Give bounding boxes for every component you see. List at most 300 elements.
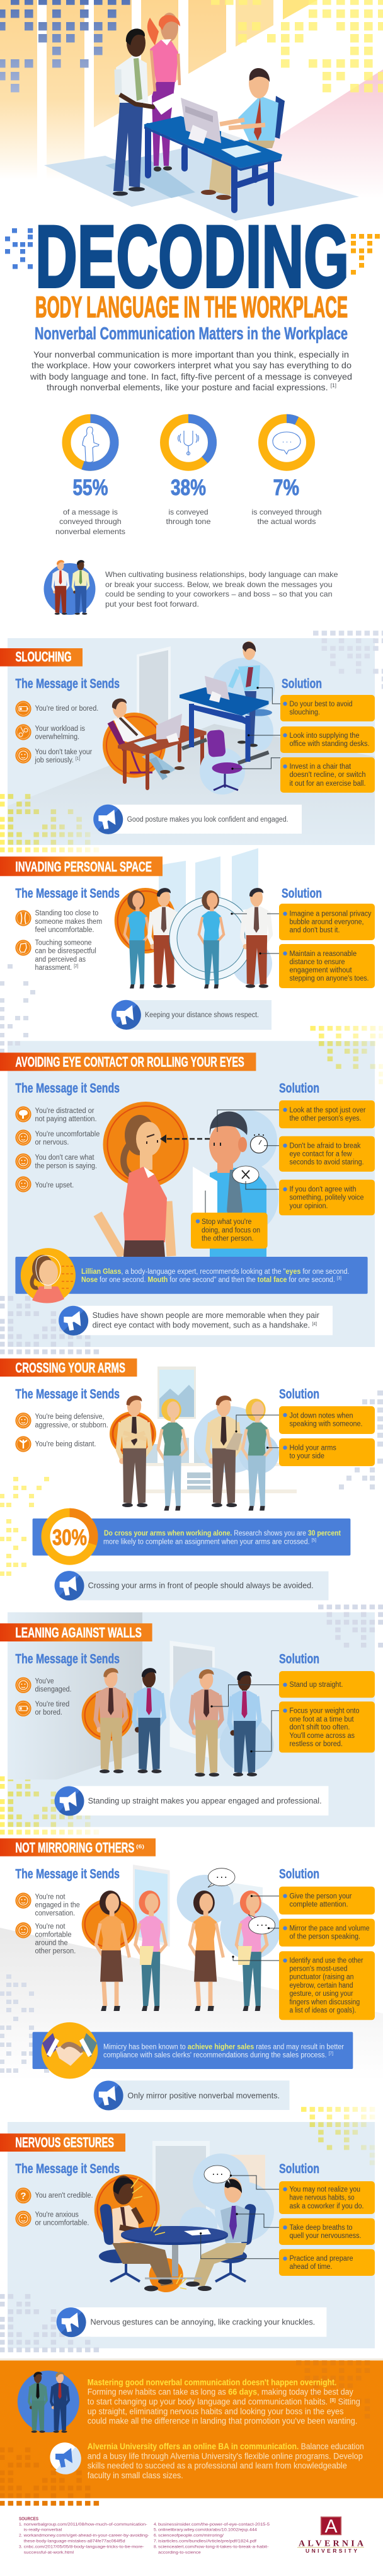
illustration: leaning man — [82, 1668, 164, 1773]
banner: mimicry: [7] — [329, 2052, 333, 2056]
intro paragraph — [30, 349, 352, 392]
illustration: slouching man at desk — [103, 699, 207, 788]
solution: attention — [279, 1887, 375, 1915]
message: tired or bored — [15, 701, 98, 717]
solution: deep breaths: Take deep breaths to — [290, 2224, 353, 2232]
desk — [148, 126, 271, 210]
text: make or break — [105, 570, 338, 609]
banner: Lillian Glass: [3] — [337, 1276, 341, 1281]
sources: cnbc.com/2017/05/05/8-body-language-tricks-to-be-more- — [24, 2544, 144, 2549]
stat: 55%: of a message is — [63, 508, 118, 516]
solution: privacy bubble: bubble around everyone, — [290, 919, 364, 926]
heading bar: crossing — [0, 1358, 137, 1377]
banner: Lillian Glass: Nose for one second. Mouth for one second" and then the total face for one second. — [81, 1276, 339, 1284]
message: tired or bored: You're tired or bored. — [35, 705, 98, 713]
icon: white megaphone — [50, 2442, 81, 2474]
solution: avoid slouching: slouching. — [290, 709, 320, 716]
message: anxious: You're anxious — [35, 2212, 79, 2219]
solution: practice — [279, 2249, 375, 2276]
solution: privacy bubble — [279, 904, 375, 940]
solution: spot over eyes: the other person's eyes. — [290, 1115, 362, 1122]
icon: woman face — [21, 1248, 76, 1303]
solution: punctuator: eyebrow, certain hand — [290, 1982, 353, 1990]
heading: solution: Solution — [282, 885, 322, 900]
icon: person — [83, 427, 99, 462]
icon: handshake — [42, 2022, 98, 2078]
illustration: privacy bubble — [169, 888, 272, 988]
message: upset — [15, 1176, 74, 1192]
solution: stop and focus — [191, 1213, 268, 1249]
stat: 7%: 7% — [273, 475, 299, 500]
message: do not care: You don't care what — [35, 1154, 94, 1162]
text: mastering nonverbal communication: to start changing up your body language and communication habits. — [88, 2397, 343, 2406]
heading: solution: Solution — [279, 1866, 319, 1881]
man standing — [113, 28, 155, 195]
sources: 7. — [154, 2539, 157, 2544]
heading: solution: Solution — [279, 1652, 319, 1667]
arrows: connectors — [232, 1895, 279, 1961]
illustration: man with good eye contact — [193, 1110, 278, 1257]
panel: not mirroring others — [0, 1838, 383, 2111]
solution: ask a coworker: You may not realize you — [290, 2186, 360, 2194]
solution: standing desks — [280, 726, 375, 753]
solution: focus weight: restless or bored. — [290, 1740, 343, 1748]
donut: 30%: 30% — [52, 1525, 87, 1550]
message: tired: You're tired — [35, 1701, 69, 1708]
solution: reasonable distance: engagement without — [290, 967, 352, 974]
heading bar: slouching: SLOUCHING — [15, 649, 72, 665]
door — [137, 646, 171, 744]
illustration: woman rolling eyes — [98, 1102, 189, 1257]
solution: punctuator: gesture, or using your — [290, 1990, 353, 1998]
message: uncomfortable: You're uncomfortable — [35, 1131, 100, 1138]
icon: two men talking — [44, 560, 96, 615]
panel: nervous gestures — [0, 2109, 375, 2350]
message: touching: Touching someone — [35, 940, 92, 947]
heading: the message it sends: The Message it Sends — [15, 1081, 120, 1096]
text: make or break: could be sending to your coworkers – and boss – so that you can — [105, 590, 333, 598]
message: distracted: not paying attention. — [35, 1116, 97, 1123]
solution: arms at side: Hold your arms — [290, 1444, 336, 1452]
illustration: standing straight — [170, 1667, 274, 1776]
callout: knuckles — [57, 2307, 326, 2337]
sources: these-body-language-mistakes-a874fe77ac064f5d — [24, 2539, 125, 2544]
text: Alvernia University offer: skills needed to succeed as a professional and learn from knowledgeable — [88, 2461, 347, 2471]
callout: memorable: direct eye contact with body movement, such as a handshake. — [93, 1320, 318, 1329]
solution: stop and focus: doing, and focus on — [202, 1227, 260, 1234]
message: tired — [15, 1701, 69, 1716]
arrows: connectors — [200, 2174, 279, 2259]
illustration: crossed arms — [110, 1396, 186, 1510]
banner: 30% — [33, 1513, 350, 1561]
illustration: too close — [115, 888, 178, 988]
solution: notes — [279, 1406, 375, 1434]
panel: leaning against walls — [0, 1607, 383, 1832]
intro paragraph: through nonverbal elements, like your posture and facial expressions. — [47, 382, 317, 392]
stat: 7% — [252, 419, 321, 526]
solution: spot over eyes: Look at the spot just over — [290, 1107, 366, 1114]
sources: 2. — [19, 2534, 23, 2538]
callout: mirror positive: Only mirror positive nonverbal movements. — [127, 2090, 280, 2100]
message: defensive: aggressive, or stubborn. — [35, 1421, 108, 1429]
message: not comfortable: other person. — [35, 1948, 76, 1955]
callout: memorable: [4] — [312, 1322, 317, 1326]
sources: sciencealert.com/how-long-it-takes-to-break-a-habit- — [158, 2544, 268, 2549]
message: not comfortable — [15, 1922, 76, 1955]
sources: isiarticles.com/bundles/Article/pre/pdf/1824.pdf — [158, 2539, 256, 2544]
panel: slouching — [0, 633, 383, 850]
heading bar: eye contact — [0, 1052, 256, 1071]
solution: stand straight: Stand up straight. — [290, 1681, 343, 1689]
callout: good posture: Good posture makes you look confident and engaged. — [127, 816, 289, 824]
message: too close: someone makes them — [35, 918, 102, 926]
icon: stopwatch — [251, 1134, 267, 1153]
sources: according-to-science — [158, 2550, 201, 2555]
solution: focus weight — [279, 1701, 375, 1752]
icon: tuning fork — [178, 431, 199, 455]
solution: punctuator: a list of ideas or goals). — [290, 2007, 357, 2014]
heading: the message it sends: The Message it Sends — [15, 1386, 120, 1401]
message: not serious: job seriously. — [35, 757, 77, 764]
text: mastering nonverbal communication — [88, 2377, 360, 2426]
message: anxious — [15, 2211, 89, 2227]
heading bar: slouching — [0, 648, 83, 667]
hero: office scene — [0, 0, 383, 221]
desk top and monitor — [144, 98, 282, 171]
stat: 55%: nonverbal elements — [55, 527, 125, 536]
solution: reasonable distance — [279, 944, 375, 988]
panel: conclusion — [0, 2358, 383, 2503]
stat: 7%: is conveyed through — [252, 508, 321, 516]
solution: privacy bubble: and don't bust it. — [290, 927, 340, 935]
message: do not care: the person is saying. — [35, 1162, 97, 1170]
solution: standing desks: office with standing desks. — [290, 740, 369, 748]
callout: knuckles: Nervous gestures can be annoying, like cracking your knuckles. — [91, 2317, 315, 2327]
stat: 55% — [55, 419, 125, 536]
solution: arms at side — [279, 1438, 375, 1466]
nervous marks — [131, 2178, 186, 2289]
solution: reasonable distance: distance to ensure — [290, 959, 345, 966]
solution: reasonable distance: stepping on anyone's toes. — [290, 975, 369, 982]
message: uncomfortable: or nervous. — [35, 1139, 69, 1146]
message: not engaged: engaged in the — [35, 1901, 80, 1909]
message: workload — [15, 724, 85, 741]
heading: solution: Solution — [279, 1386, 319, 1401]
solution: pace and volume: Mirror the pace and volume — [290, 1925, 369, 1933]
solution: privacy bubble: Imagine a personal privacy — [290, 911, 372, 918]
heading bar: eye contact: AVOIDING EYE CONTACT OR ROLLING YOUR EYES — [15, 1054, 244, 1070]
paper — [152, 93, 178, 115]
stat: 55%: 55% — [73, 475, 108, 500]
solution: punctuator: Identify and use the other — [290, 1957, 363, 1965]
solution: punctuator: person's most-used — [290, 1966, 348, 1973]
message: do not care — [15, 1153, 97, 1170]
intro paragraph: Your nonverbal communication is more important than you think, especially in — [33, 349, 349, 359]
message: upset: You're upset. — [35, 1182, 74, 1189]
message: not credible — [15, 2188, 93, 2203]
solution: focus weight: You'll come across as — [290, 1732, 355, 1740]
office background: window and shelves — [139, 1367, 297, 1493]
callout: mirror positive — [94, 2080, 290, 2111]
banner: Lillian Glass — [15, 1248, 368, 1303]
arrows: connectors — [210, 1685, 279, 1752]
banner: mimicry — [33, 2022, 353, 2078]
solution: arms at side: to your side — [290, 1453, 324, 1460]
text: Alvernia University offer: Alvernia University offers an online BA in communication. Balance education — [88, 2442, 364, 2451]
solution: voice opinion — [279, 1180, 375, 1215]
message: touching: and perceived as — [35, 956, 86, 964]
callout: keep distance: Keeping your distance shows respect. — [145, 1011, 259, 1019]
speech bubble: bottom — [248, 1915, 275, 1934]
text: mastering nonverbal communication: Mastering good nonverbal communication doesn't happen overnight. — [88, 2377, 336, 2387]
sources: 3. — [19, 2544, 23, 2549]
orange pixel squares — [351, 234, 380, 275]
solution: notes: Jot down notes when — [290, 1412, 353, 1419]
sources: SOURCES — [19, 2517, 38, 2522]
solution: reasonable distance: Maintain a reasonable — [290, 950, 357, 958]
callout: good posture — [93, 805, 302, 834]
arrows: connectors — [231, 687, 280, 770]
heading bar: leaning — [0, 1623, 152, 1641]
sources: workandmoney.com/s/get-ahead-in-your-career-by-avoiding- — [23, 2534, 149, 2538]
text: Alvernia University offer: and a busy life through Alvernia University's flexible online programs. Develop — [88, 2451, 363, 2461]
text: make or break: or break your success. Below, we break down the messages you — [105, 580, 333, 589]
message: touching: can be disrespectful — [35, 948, 96, 955]
message: defensive — [15, 1413, 108, 1429]
solution: chair — [280, 757, 375, 793]
background: windows — [152, 2141, 265, 2245]
seated man — [238, 68, 285, 148]
message: workload: Your workload is — [35, 725, 85, 733]
text: mastering nonverbal communication: could make all the difference in landing that promotion you've been wanting. — [88, 2416, 357, 2426]
panel: eye contact — [0, 1029, 383, 1352]
solution: voice opinion: your opinion. — [290, 1203, 328, 1210]
solution: punctuator: punctuator (raising an — [290, 1974, 354, 1981]
intro paragraph: [1] — [331, 383, 336, 388]
panel: crossing your arms — [0, 1358, 383, 1600]
arrows: connectors — [235, 1415, 279, 1448]
solution: deep breaths: quell your nervousness. — [290, 2232, 362, 2240]
solution: break contact: eye contact for a few — [290, 1151, 352, 1158]
heading bar: crossing: CROSSING YOUR ARMS — [15, 1360, 125, 1376]
solution: deep breaths — [279, 2218, 375, 2245]
illustration: not mirroring — [82, 1891, 166, 2011]
stat: 38%: through tone — [166, 517, 211, 526]
sources: 8. — [154, 2544, 157, 2549]
banner: mimicry: compliance with sales clerks' recommendations during the sales process. — [103, 2052, 338, 2060]
solution: pace and volume: of the person speaking. — [290, 1933, 360, 1941]
solution: chair: doesn't recline, or switch — [290, 771, 365, 779]
wall and door — [8, 1612, 215, 1780]
message: not serious: [1] — [76, 757, 80, 761]
solution: pace and volume — [279, 1919, 375, 1947]
message: workload: overwhelming. — [35, 733, 79, 741]
solution: voice opinion: If you don't agree with — [290, 1186, 357, 1194]
logo: Alvernia University: ALVERNIA — [299, 2539, 364, 2549]
message: not serious: You don't take your — [35, 749, 92, 756]
message: not comfortable: comfortable — [35, 1932, 72, 1939]
speech bubble — [204, 2165, 231, 2184]
message: distant: You're being distant. — [35, 1440, 96, 1448]
sources — [19, 2517, 270, 2555]
message: disengaged: You've — [35, 1677, 54, 1685]
stat: 38%: is conveyed — [169, 508, 208, 516]
solution: break contact: Don't be afraid to break — [290, 1143, 361, 1150]
message: touching — [15, 940, 96, 972]
solution: break contact — [279, 1136, 375, 1172]
heading: the message it sends: The Message it Sends — [15, 676, 120, 691]
seated man: left — [99, 2176, 173, 2292]
sources: businessinsider.com/the-power-of-eye-contact-2015-5 — [158, 2522, 270, 2527]
solution: ask a coworker: have nervous habits, so — [290, 2194, 354, 2202]
banner: mimicry: Mimicry has been known to achieve higher sales rates and may result in better — [103, 2043, 344, 2051]
text: mastering nonverbal communication: Forming new habits can take as long as 66 days, making today the best day — [88, 2387, 353, 2397]
illustration: standing desk and chair — [180, 641, 275, 795]
solution: practice: Practice and prepare — [290, 2255, 353, 2263]
text: Alvernia University offer — [88, 2442, 364, 2480]
solution: notes: speaking with someone. — [290, 1421, 363, 1428]
message: anxious: or uncomfortable. — [35, 2219, 89, 2227]
sources: 6. — [154, 2534, 157, 2538]
stat: 7%: the actual words — [257, 517, 316, 526]
heading bar: mirroring — [0, 1838, 156, 1856]
heading: the message it sends: The Message it Sends — [15, 1652, 120, 1667]
heading: the message it sends: The Message it Sends — [15, 885, 120, 900]
solution: focus weight: Focus your weight onto — [290, 1708, 359, 1715]
heading bar: mirroring: (6) — [136, 1844, 144, 1850]
donut: 30% — [45, 1513, 93, 1561]
message: too close: Standing too close to — [35, 910, 98, 918]
solution: attention: Give the person your — [290, 1893, 352, 1901]
solution: ask a coworker: ask a coworker if you do. — [290, 2203, 364, 2210]
heading bar: leaning: LEANING AGAINST WALLS — [15, 1625, 142, 1641]
text: make or break: When cultivating business relationships, body language can make — [105, 570, 338, 579]
sources: successful-at-work.html — [24, 2550, 74, 2555]
seated man: right — [186, 2177, 256, 2291]
banner: 30%: [5] — [312, 1538, 316, 1542]
callout: memorable: Studies have shown people are more memorable when they pair — [93, 1310, 320, 1320]
heading bar: nervous: NERVOUS GESTURES — [15, 2135, 114, 2150]
message: tired: or bored. — [35, 1709, 62, 1716]
solution: standing desks: Look into supplying the — [290, 732, 359, 740]
windows — [159, 848, 258, 949]
icon: speech bubble — [273, 432, 300, 454]
message: not engaged: conversation. — [35, 1910, 75, 1918]
illustration: mirroring — [177, 1875, 280, 2011]
illustration: handshake — [18, 2370, 79, 2433]
stat: 38%: 38% — [171, 475, 206, 500]
solution: avoid slouching: Do your best to avoid — [290, 701, 353, 708]
message: uncomfortable — [15, 1129, 100, 1146]
icon: disagree bubble — [232, 1166, 259, 1184]
text: make or break: put your best foot forward. — [105, 600, 199, 609]
logo: Alvernia University: UNIVERSITY — [306, 2548, 357, 2554]
solution: chair: Invest in a chair that — [290, 763, 352, 771]
message: not comfortable: You're not — [35, 1923, 66, 1930]
message: too close: feel uncomfortable. — [35, 926, 94, 934]
solution: chair: it out for an exercise ball. — [290, 780, 365, 788]
heading bar: nervous — [0, 2133, 125, 2152]
heading: solution: Solution — [282, 676, 322, 691]
solution: punctuator — [279, 1951, 375, 2020]
callout: standing up straight — [54, 1786, 329, 1816]
solution: focus weight: one foot at a time but — [290, 1716, 354, 1723]
callout: avoid crossing: Crossing your arms in front of people should always be avoided. — [88, 1581, 314, 1590]
panel: invading personal space — [0, 848, 375, 1030]
banner: 30%: Do cross your arms when working alone. Research shows you are 30 percent — [104, 1530, 341, 1537]
windows — [133, 1865, 263, 1947]
solution: stop and focus: Stop what you're — [202, 1218, 252, 1226]
solution: stand straight — [279, 1671, 375, 1698]
intro paragraph: the workplace. How your coworkers interpret what you say has everything to do — [31, 360, 352, 370]
message: not engaged — [15, 1892, 80, 1918]
banner: 30%: more likely to complete an assignment when your arms are crossed. — [103, 1538, 322, 1546]
message: not engaged: You're not — [35, 1893, 66, 1901]
message: defensive: You're being defensive, — [35, 1413, 105, 1421]
sources: onlinelibrary.wiley.com/doi/abs/10.1002/ejsp.444 — [158, 2528, 257, 2532]
heading: the message it sends: The Message it Sends — [15, 2161, 120, 2176]
message: touching: harassment. — [35, 964, 75, 972]
heading: solution: Solution — [279, 1081, 319, 1096]
woman standing — [147, 13, 180, 172]
solution: focus weight: don't shift too often. — [290, 1724, 350, 1732]
banner: Lillian Glass: Lillian Glass, a body-language expert, recommends looking at the "eyes for one second. — [81, 1268, 349, 1276]
message: not serious — [15, 747, 92, 764]
heading bar: invading: INVADING PERSONAL SPACE — [15, 859, 152, 875]
sources: is-really-nonverbal — [24, 2528, 62, 2532]
heading bar: mirroring: NOT MIRRORING OTHERS — [15, 1839, 134, 1855]
sources: 1. — [19, 2522, 23, 2527]
solution: break contact: seconds to avoid staring. — [290, 1159, 364, 1167]
callout: memorable — [59, 1306, 333, 1336]
message: distant — [15, 1436, 96, 1452]
round table — [121, 2226, 228, 2278]
solution: stop and focus: the other person. — [202, 1235, 254, 1243]
text: mastering nonverbal communication: Sitting — [336, 2397, 360, 2406]
sources: scienceofpeople.com/mirroring/ — [158, 2534, 224, 2538]
message: not credible: ? — [20, 2191, 26, 2201]
text: Alvernia University offer: faculty in small class sizes. — [88, 2471, 183, 2480]
message: touching: [2] — [74, 964, 79, 969]
callout: keep distance — [111, 1000, 272, 1030]
arrows: connectors — [205, 1110, 279, 1213]
illustration: notes and arms at side — [194, 1396, 279, 1510]
heading bar: invading — [0, 856, 163, 876]
solution: spot over eyes — [279, 1100, 375, 1128]
solution: punctuator: fingers when discussing — [290, 1998, 360, 2006]
blue pixel squares — [5, 228, 33, 269]
message: distracted: You're distracted or — [35, 1107, 94, 1115]
message: not credible: You aren't credible. — [35, 2192, 93, 2200]
logo: Alvernia University — [297, 2516, 364, 2554]
message: distracted — [15, 1106, 97, 1123]
solution: avoid slouching — [280, 695, 375, 721]
floor shadows — [44, 147, 359, 221]
logo: Alvernia University: A — [324, 2516, 338, 2537]
solution: ask a coworker — [279, 2181, 375, 2214]
arrows: connectors — [231, 912, 279, 955]
stat: 38% — [164, 419, 212, 526]
message: too close — [15, 910, 102, 934]
heading: solution: Solution — [279, 2161, 319, 2176]
solution: voice opinion: something, politely voice — [290, 1194, 364, 1202]
sources: 5. — [154, 2528, 157, 2532]
arrow: gaze — [160, 1134, 210, 1143]
heading: the message it sends: The Message it Sends — [15, 1866, 120, 1881]
callout: avoid crossing — [54, 1571, 329, 1600]
sources: nonverbalgroup.com/2011/08/how-much-of-communication- — [24, 2522, 147, 2527]
text: mastering nonverbal communication: up straight, eliminating nervous habits and looking your boss in the eyes — [88, 2406, 344, 2416]
